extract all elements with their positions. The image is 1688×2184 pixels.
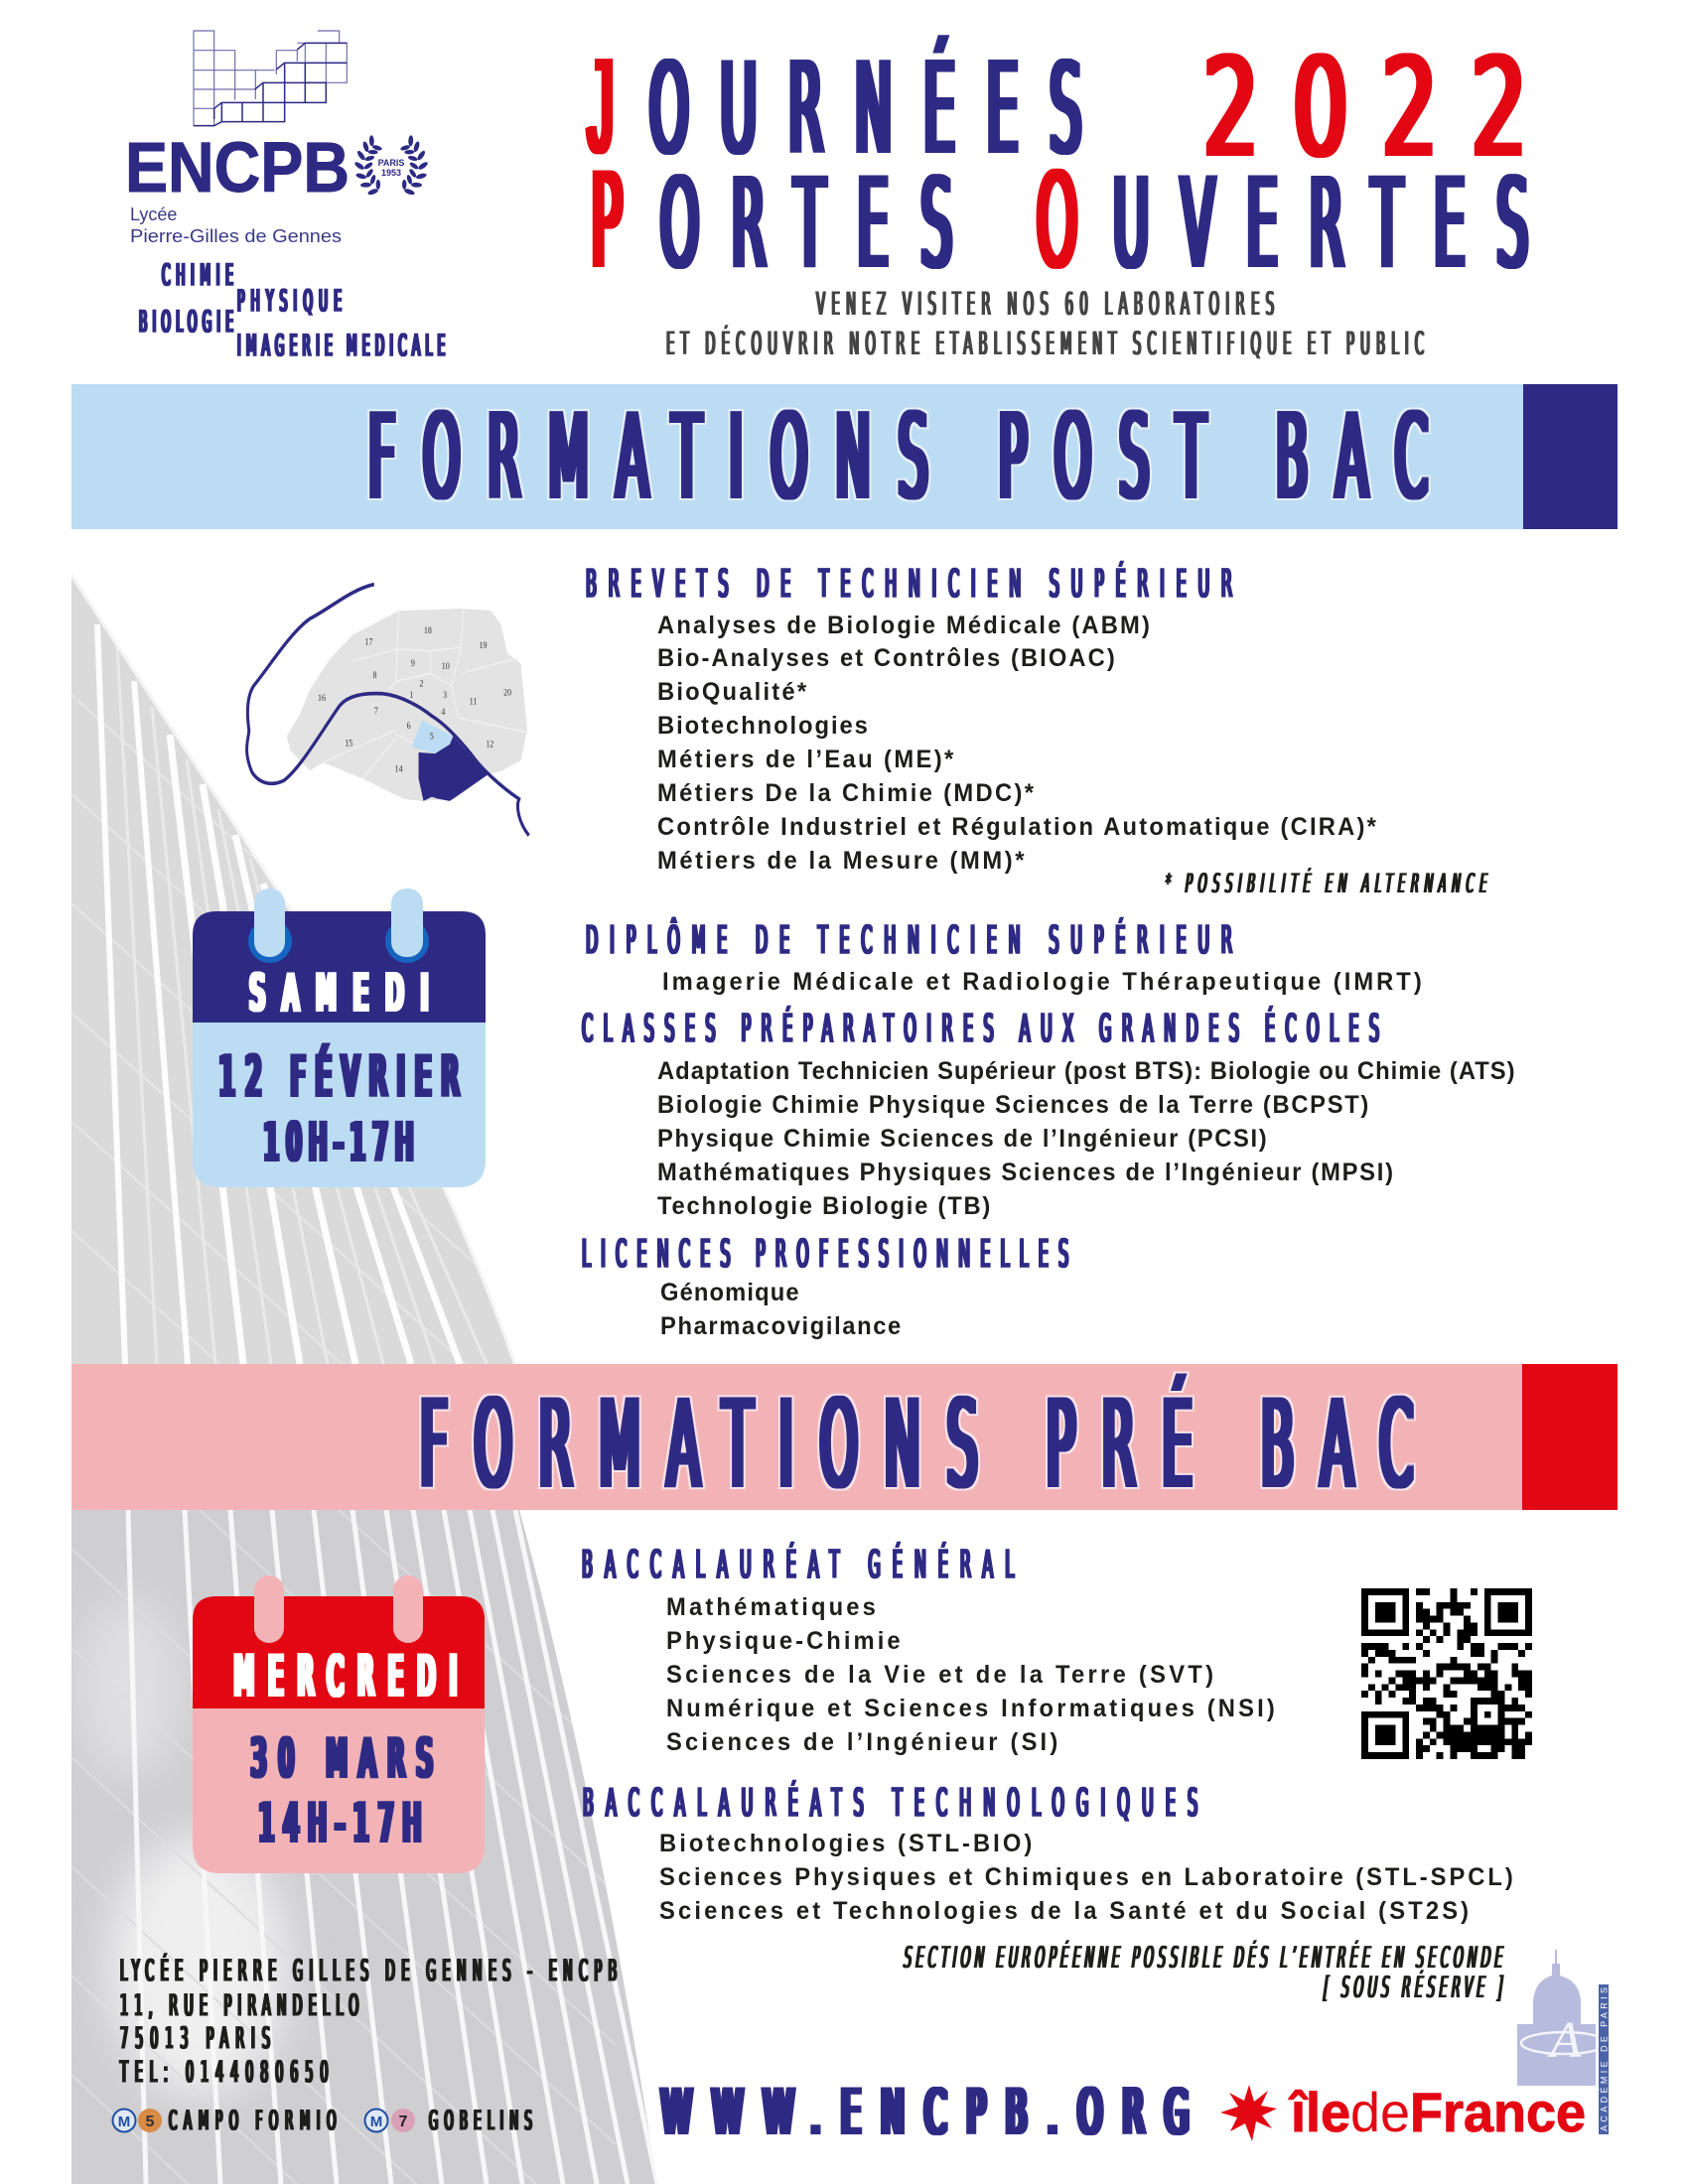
title: ORTES: [660, 153, 952, 296]
list: bac technologiques: Sciences et Technologies de la Santé et du Social (ST2S): [659, 1897, 1469, 1925]
heading: licences: LICENCES PROFESSIONNELLES: [582, 1232, 1068, 1276]
arrondissement numbers: 7: [374, 705, 378, 716]
13th arrondissement: [419, 737, 488, 801]
wreath text: PARIS: [378, 158, 404, 168]
calendar: samedi: 10H-17H: [264, 1114, 413, 1172]
icon: metro 7: [365, 2109, 415, 2132]
title: UVERTES: [1113, 153, 1528, 296]
list: bac general: Sciences de la Vie et de la Terre (SVT): [666, 1661, 1213, 1689]
arrondissement numbers: 6: [407, 720, 411, 731]
arrondissement numbers: 20: [503, 687, 512, 698]
wreath text: [378, 158, 404, 178]
list: bac general: Sciences de l’Ingénieur (SI): [666, 1728, 1057, 1756]
title: [588, 30, 1528, 298]
calendar: mercredi: 30 MARS: [251, 1727, 432, 1789]
calendar: mercredi: 14H-17H: [259, 1792, 421, 1853]
address block: [119, 1953, 617, 2090]
calendar: samedi: 12 FÉVRIER: [219, 1044, 459, 1108]
arrondissement numbers: 18: [424, 624, 432, 635]
logo: Ile-de-France: îledeFrance: [1288, 2081, 1586, 2143]
title: O: [1037, 145, 1077, 298]
icon: metro 5: 5: [146, 2114, 155, 2130]
arrondissement numbers: 1: [409, 689, 413, 700]
band: formations pre bac: [71, 1364, 1618, 1515]
address block: TEL: 0144080650: [119, 2056, 328, 2090]
logo ENCPB: [125, 31, 445, 363]
calendar: samedi: [193, 888, 486, 1187]
note: alternance: * POSSIBILITÉ EN ALTERNANCE: [1163, 867, 1489, 898]
note: section europeenne: [ SOUS RÉSERVE ]: [1322, 1970, 1505, 2005]
arrondissement numbers: [318, 624, 512, 774]
address block: 11, RUE PIRANDELLO: [120, 1989, 358, 2023]
building photo: lower section: [71, 1504, 667, 2184]
arrondissement numbers: 8: [372, 669, 377, 680]
heading: bac technologiques: BACCALAURÉATS TECHNOLOGIQUES: [583, 1781, 1197, 1825]
subtitle: ET DÉCOUVRIR NOTRE ETABLISSEMENT SCIENTIFIQUE ET PUBLIC: [666, 325, 1424, 362]
wreath text: 1953: [381, 168, 401, 178]
list: bac general: Numérique et Sciences Informatiques (NSI): [666, 1695, 1275, 1722]
calendar: samedi: SAMEDI: [250, 965, 428, 1022]
arrondissement numbers: 9: [411, 657, 415, 668]
icon: metro 7: 7: [399, 2114, 408, 2130]
icon: laurel wreath: [353, 133, 429, 200]
school name: [130, 205, 342, 246]
heading: bac general: BACCALAURÉAT GÉNÉRAL: [582, 1543, 1015, 1586]
metro stations: [113, 2105, 532, 2135]
title: 2022: [1203, 30, 1527, 188]
icon: metro 5: M: [118, 2114, 130, 2130]
arrondissement numbers: 17: [364, 636, 373, 647]
river Seine: [247, 585, 529, 836]
list: bac technologiques: Sciences Physiques et Chimiques en Laboratoire (STL-SPCL): [659, 1863, 1513, 1891]
calendar: mercredi: [193, 1575, 485, 1873]
disciplines: [139, 259, 445, 363]
station: gobelins: GOBELINS: [429, 2105, 532, 2135]
station: campo formio: CAMPO FORMIO: [169, 2105, 337, 2135]
5th arrondissement: [412, 720, 453, 753]
list: CPGE: Biologie Chimie Physique Sciences de la Terre (BCPST): [657, 1091, 1368, 1119]
arrondissement numbers: 19: [480, 639, 488, 650]
band: formations pre bac: FORMATIONS PRÉ BAC: [420, 1374, 1413, 1515]
calendar: mercredi: MERCREDI: [234, 1645, 457, 1707]
arrondissement numbers: 11: [470, 696, 477, 707]
pre bac lists: [582, 1543, 1513, 2005]
arrondissement numbers: 2: [420, 678, 424, 689]
list: BTS: [657, 612, 1376, 875]
band: formations post bac: [71, 384, 1618, 529]
icon: metro 7: M: [370, 2114, 382, 2130]
arrondissement numbers: 14: [395, 763, 403, 774]
list: bac general: Physique-Chimie: [666, 1627, 901, 1655]
list: bac technologiques: [659, 1830, 1513, 1925]
heading: DTS: DIPLÔME DE TECHNICIEN SUPÉRIEUR: [586, 918, 1232, 962]
subtitle: VENEZ VISITER NOS 60 LABORATOIRES: [816, 285, 1274, 323]
logo: Academie de Paris: A: [1547, 2012, 1582, 2069]
heading: CPGE: CLASSES PRÉPARATOIRES AUX GRANDES ÉCOLES: [582, 1007, 1379, 1050]
wordmark: ENCPB: [125, 129, 350, 207]
arrondissement numbers: 16: [318, 692, 326, 703]
title: J: [588, 31, 614, 181]
note: section europeenne: SECTION EUROPÉENNE POSSIBLE DÉS L’ENTRÉE EN SECONDE: [902, 1940, 1505, 1976]
list: CPGE: Physique Chimie Sciences de l’Ingénieur (PCSI): [657, 1125, 1267, 1153]
arrondissement numbers: 3: [443, 689, 448, 700]
post bac lists: [582, 562, 1515, 1340]
logo: Academie de Paris: ACADÉMIE DE PARIS: [1599, 1987, 1609, 2131]
list: BTS: Biotechnologies: [657, 712, 868, 740]
website: WWW.ENCPB.ORG: [661, 2077, 1189, 2148]
address block: 75013 PARIS: [120, 2022, 270, 2056]
list: BTS: Métiers de l’Eau (ME)*: [657, 746, 954, 773]
icon: periodic table grid: [194, 31, 347, 126]
arrondissement numbers: 4: [441, 706, 446, 717]
list: bac general: Mathématiques: [666, 1593, 876, 1621]
arrondissement numbers: 5: [430, 731, 434, 742]
building photo: upper section: [71, 566, 528, 1414]
disciplines: CHIMIE: [162, 259, 233, 293]
school name: Lycée: [130, 205, 177, 224]
title: P: [591, 145, 623, 298]
map of Paris: [247, 585, 529, 836]
band: formations post bac: FORMATIONS POST BAC: [368, 390, 1428, 526]
list: CPGE: Technologie Biologie (TB): [657, 1192, 990, 1220]
subtitle: [666, 285, 1424, 362]
QR code: [1361, 1588, 1532, 1759]
logo: Academie de Paris: [1517, 1950, 1609, 2134]
list: BTS: Métiers de la Mesure (MM)*: [657, 847, 1025, 875]
list: BTS: Bio-Analyses et Contrôles (BIOAC): [657, 644, 1115, 672]
school name: Pierre-Gilles de Gennes: [130, 226, 342, 246]
arrondissement numbers: 15: [345, 738, 353, 749]
icon: metro 5: [113, 2109, 162, 2132]
arrondissement numbers: 10: [442, 660, 450, 671]
list: CPGE: Mathématiques Physiques Sciences de l’Ingénieur (MPSI): [657, 1159, 1393, 1186]
list: bac general: [666, 1593, 1275, 1756]
list: BTS: Analyses de Biologie Médicale (ABM): [657, 612, 1150, 639]
heading: BTS: BREVETS DE TECHNICIEN SUPÉRIEUR: [586, 562, 1232, 606]
list: CPGE: [657, 1057, 1515, 1220]
list: BTS: Métiers De la Chimie (MDC)*: [657, 779, 1035, 807]
list: DTS: Imagerie Médicale et Radiologie Thérapeutique (IMRT): [662, 968, 1422, 996]
list: CPGE: Adaptation Technicien Supérieur (post BTS): Biologie ou Chimie (ATS): [657, 1057, 1515, 1085]
list: bac technologiques: Biotechnologies (STL-BIO): [659, 1830, 1032, 1857]
address block: LYCÉE PIERRE GILLES DE GENNES - ENCPB: [120, 1953, 617, 1988]
list: BTS: BioQualité*: [657, 678, 807, 706]
list: licences: [660, 1279, 901, 1340]
note: section europeenne: [902, 1940, 1505, 2005]
list: licences: Génomique: [660, 1279, 799, 1306]
list: licences: Pharmacovigilance: [660, 1312, 901, 1340]
arrondissement numbers: 12: [486, 739, 493, 750]
disciplines: BIOLOGIE: [139, 306, 233, 340]
disciplines: IMAGERIE MEDICALE: [237, 330, 445, 363]
title: OURNÉES: [649, 35, 1081, 182]
disciplines: PHYSIQUE: [237, 285, 342, 319]
list: BTS: Contrôle Industriel et Régulation Automatique (CIRA)*: [657, 813, 1376, 841]
